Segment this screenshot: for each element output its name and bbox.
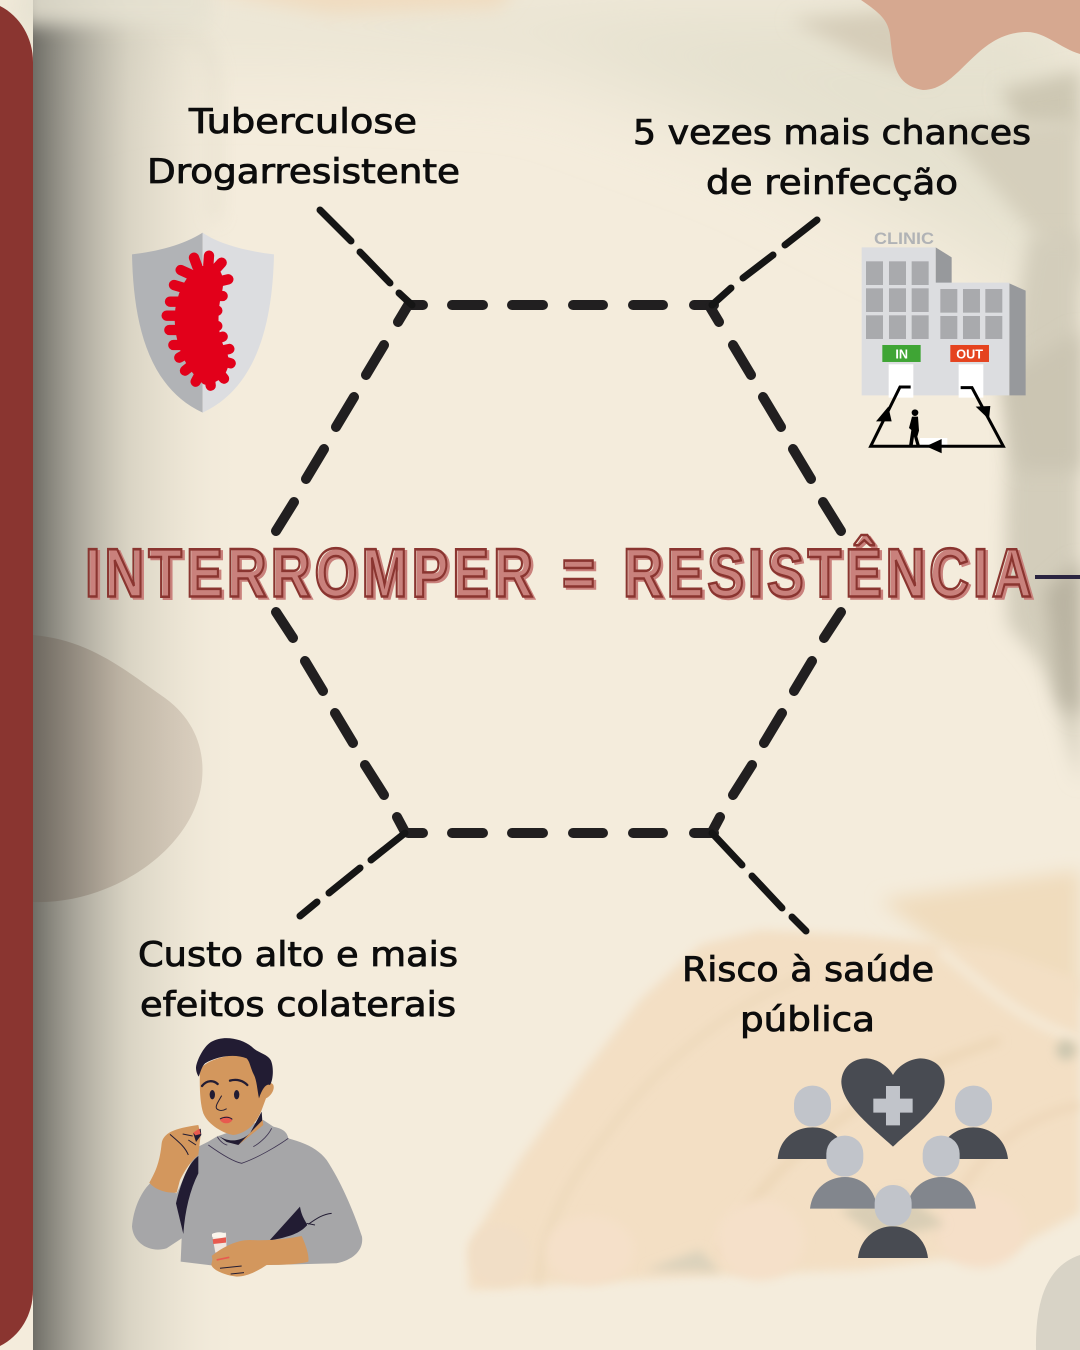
label: custo alto [138,935,458,1025]
connector: top right [712,220,817,305]
icon: clinic building with in/out loop: CLINIC [874,229,934,248]
arrow line: right of title [1035,575,1080,579]
connector: bottom left [300,833,405,916]
icon: shield with bacterium [132,233,274,413]
icon: clinic building with in/out loop: IN [895,348,908,362]
label: 5 vezes mais chances: 5 vezes mais chances [633,113,1031,153]
label: custo alto: efeitos colaterais [140,985,456,1025]
title: interromper = resistência: = [562,535,595,612]
label: 5 vezes mais chances [633,113,1031,203]
title: interromper = resistência: RESISTÊNCIA [623,534,1032,612]
label: 5 vezes mais chances: de reinfecção [706,163,958,203]
title: interromper = resistência: = [564,537,598,614]
decorative blob: left [33,635,203,902]
decorative blob: bottom right corner [1036,1255,1080,1350]
label: risco à saúde pública [682,950,934,1040]
label: tuberculose drogarresistente: Tuberculose [188,102,417,142]
decorative blob: top right [861,0,1080,90]
title: interromper = resistência [85,534,1034,614]
label: risco à saúde pública: Risco à saúde [682,950,934,990]
left red band [0,6,33,1346]
icon: clinic building with in/out loop: OUT [956,348,983,362]
connector: top left [320,210,412,305]
icon: clinic building with in/out loop [862,229,1026,453]
dashed hexagon [276,305,841,833]
label: tuberculose drogarresistente [147,102,460,192]
title: interromper = resistência: INTERROMPER [85,535,533,612]
title: interromper = resistência: RESISTÊNCIA [626,536,1034,614]
icon: people around heart with cross [778,1058,1008,1258]
connector: bottom right [712,833,806,931]
label: tuberculose drogarresistente: Drogarresistente [147,152,460,192]
label: custo alto: Custo alto e mais [138,935,458,975]
icon: man taking medication [132,1038,362,1277]
label: risco à saúde pública: pública [740,1000,875,1040]
title: interromper = resistência: INTERROMPER [88,537,536,614]
